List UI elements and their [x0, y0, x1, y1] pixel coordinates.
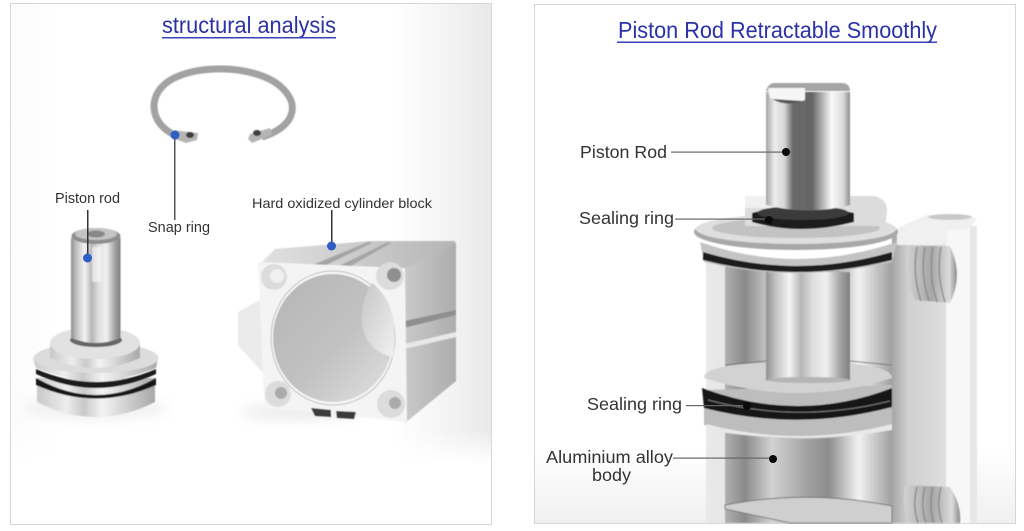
- callout: snap ring: [148, 130, 210, 236]
- callout: piston sealing ring: [587, 394, 751, 414]
- heading: structural analysis: structural analysis: [162, 12, 336, 38]
- icon: snap ring: [154, 69, 292, 143]
- callout: piston rod: Piston rod: [55, 191, 120, 207]
- fitting threads top: [906, 246, 957, 303]
- callout: top sealing ring: [579, 208, 773, 228]
- callout: hard oxidized cylinder block: [252, 195, 433, 250]
- lower rod: [766, 272, 850, 382]
- piston: [702, 345, 892, 439]
- fitting threads bottom: [904, 485, 960, 523]
- callout: aluminium alloy body: Aluminium alloy: [546, 447, 673, 467]
- callout: piston rod: Piston Rod: [580, 142, 667, 162]
- lower bore edge: [725, 497, 892, 523]
- callout: piston sealing ring: Sealing ring: [587, 394, 682, 414]
- callout: top sealing ring: Sealing ring: [579, 208, 674, 228]
- cylinder outer block: [706, 214, 977, 523]
- barrel bore: [725, 262, 892, 523]
- icon: piston rod part: [24, 228, 168, 420]
- heading: Piston Rod Retractable Smoothly: Piston Rod Retractable Smoothly: [618, 17, 937, 43]
- callout: hard oxidized cylinder block: Hard oxidized cylinder block: [252, 195, 433, 211]
- callout: aluminium alloy body: [546, 447, 777, 485]
- callout: aluminium alloy body: body: [592, 465, 631, 485]
- upper rod: [766, 83, 850, 210]
- panel: structural analysis: [10, 4, 492, 524]
- bolt holes: [261, 262, 405, 418]
- callout: piston rod: [55, 191, 120, 262]
- illustration: cylinder cutaway: [694, 83, 977, 523]
- icon: cylinder block: [238, 241, 456, 423]
- seal bushing: [752, 206, 854, 229]
- callout: snap ring: Snap ring: [148, 219, 210, 236]
- end cap: [694, 196, 898, 273]
- callout: piston rod: [580, 142, 790, 162]
- panel: piston rod retractable smoothly: [534, 4, 1016, 524]
